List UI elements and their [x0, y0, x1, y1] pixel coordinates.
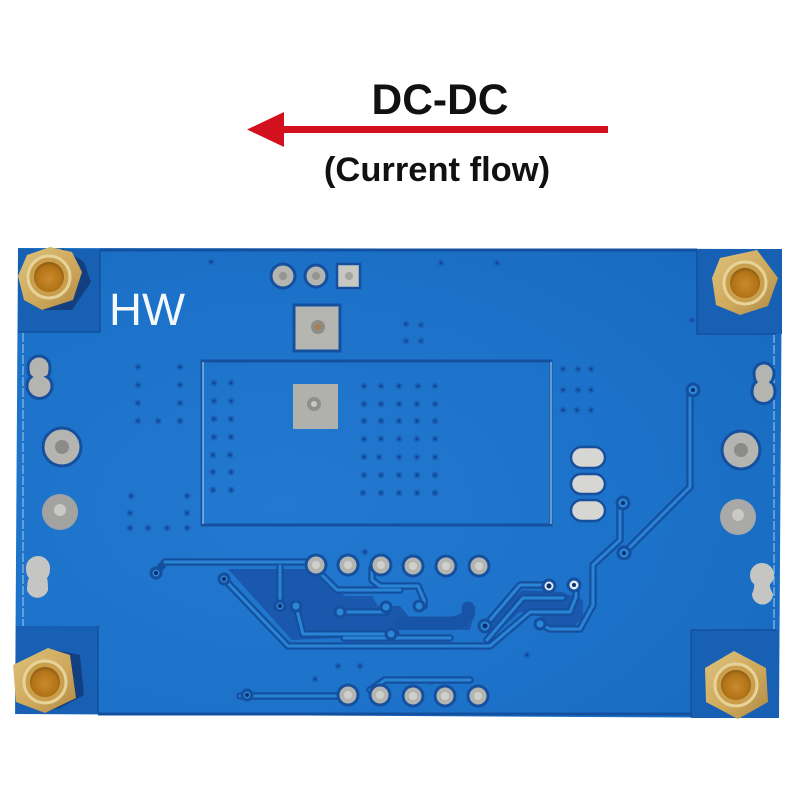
board base [15, 248, 782, 718]
solder pads: lower pin row [338, 685, 488, 706]
solder pad: large square [294, 305, 340, 351]
board edge and silk outlines [18, 250, 776, 717]
vias [128, 260, 694, 684]
corner pads [16, 249, 782, 718]
circuit traces [151, 384, 699, 700]
copper pour [228, 569, 583, 640]
subtitle: (Current flow) [324, 151, 550, 189]
icon: brass standoff bottom right [705, 651, 768, 719]
panel: circuit board [13, 247, 782, 719]
solder pad: center square [293, 384, 338, 429]
icon: brass standoff top right [712, 250, 778, 315]
logo text: HW [109, 284, 186, 335]
arrow: current flow direction [247, 112, 608, 147]
solder pads: upper pin row [306, 555, 489, 576]
title: DC-DC [372, 77, 508, 124]
solder pads: left edge [26, 356, 81, 598]
solder pads: center oval row [571, 447, 605, 521]
solder pads: right edge [720, 363, 775, 604]
icon: brass standoff top left [18, 247, 91, 310]
solder pads: top header [271, 264, 360, 288]
icon: brass standoff bottom left [13, 648, 84, 713]
shielded inset outline [202, 361, 551, 525]
